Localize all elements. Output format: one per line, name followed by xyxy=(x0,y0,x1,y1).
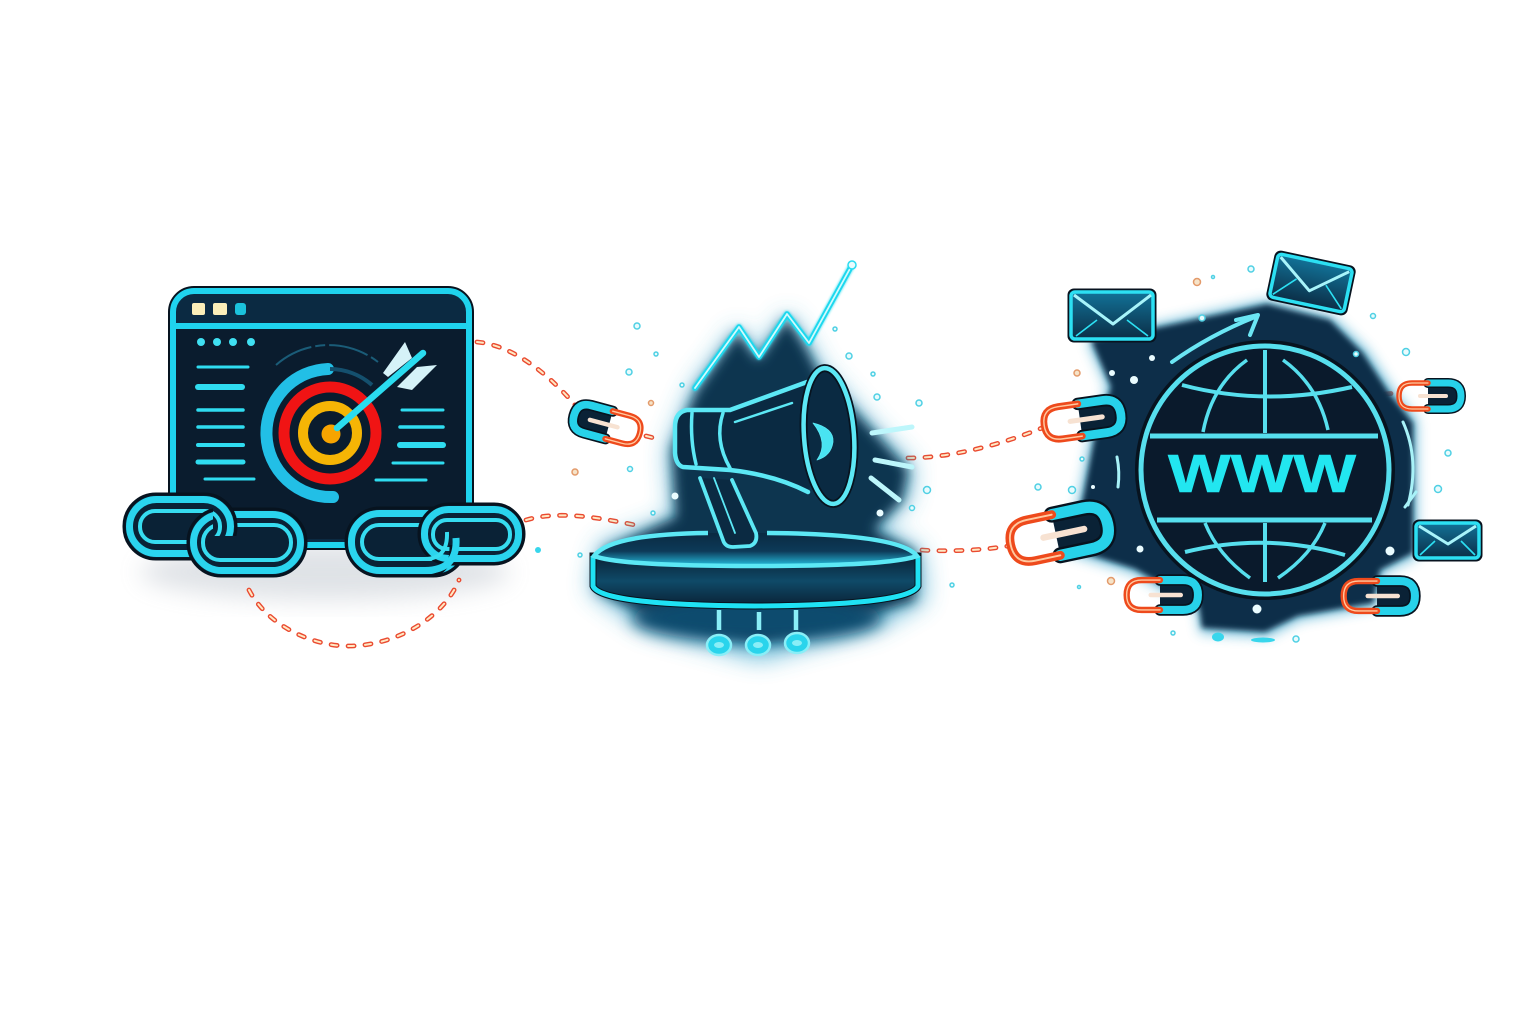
browser window frame xyxy=(173,291,469,545)
chain link left lower xyxy=(1006,504,1112,565)
soft shadow under browser xyxy=(140,544,510,600)
arrow in target xyxy=(337,342,437,428)
illustration canvas xyxy=(122,250,1482,677)
globe backdrop glow xyxy=(1067,300,1417,637)
left text lines xyxy=(198,367,254,479)
small chain link icons xyxy=(570,383,1461,611)
side swoosh arrows xyxy=(1117,422,1416,507)
www label: WWW xyxy=(1168,444,1356,504)
chain link bottom left xyxy=(1127,580,1198,610)
panel: megaphone on platform xyxy=(590,261,925,660)
panel: browser and target with chain links xyxy=(124,291,524,600)
toolbar dots xyxy=(197,338,255,346)
sound rays xyxy=(871,427,912,500)
envelope top xyxy=(1268,252,1354,314)
chain link right pair xyxy=(346,504,524,576)
right text lines xyxy=(376,410,443,480)
platform pins xyxy=(707,610,809,655)
envelope right xyxy=(1415,522,1480,559)
rising trend line xyxy=(695,265,852,388)
chain link near megaphone xyxy=(570,402,644,447)
globe xyxy=(1139,344,1391,596)
scattered particles xyxy=(535,266,1451,642)
dashed red connectors xyxy=(249,342,1398,646)
megaphone backdrop glow xyxy=(590,313,925,660)
megaphone body xyxy=(675,366,859,506)
panel: globe with envelopes and links xyxy=(1067,252,1480,637)
window buttons xyxy=(192,303,246,315)
platform xyxy=(593,533,918,606)
chain link left upper xyxy=(1042,398,1123,441)
chain link left pair xyxy=(124,494,306,576)
growth arrow xyxy=(1172,315,1258,362)
megaphone handle xyxy=(700,478,756,547)
chain link bottom right xyxy=(1344,581,1415,611)
chain link right top xyxy=(1399,383,1461,409)
envelope left xyxy=(1070,291,1154,340)
target rings xyxy=(266,345,378,497)
trend line tip xyxy=(848,261,856,269)
